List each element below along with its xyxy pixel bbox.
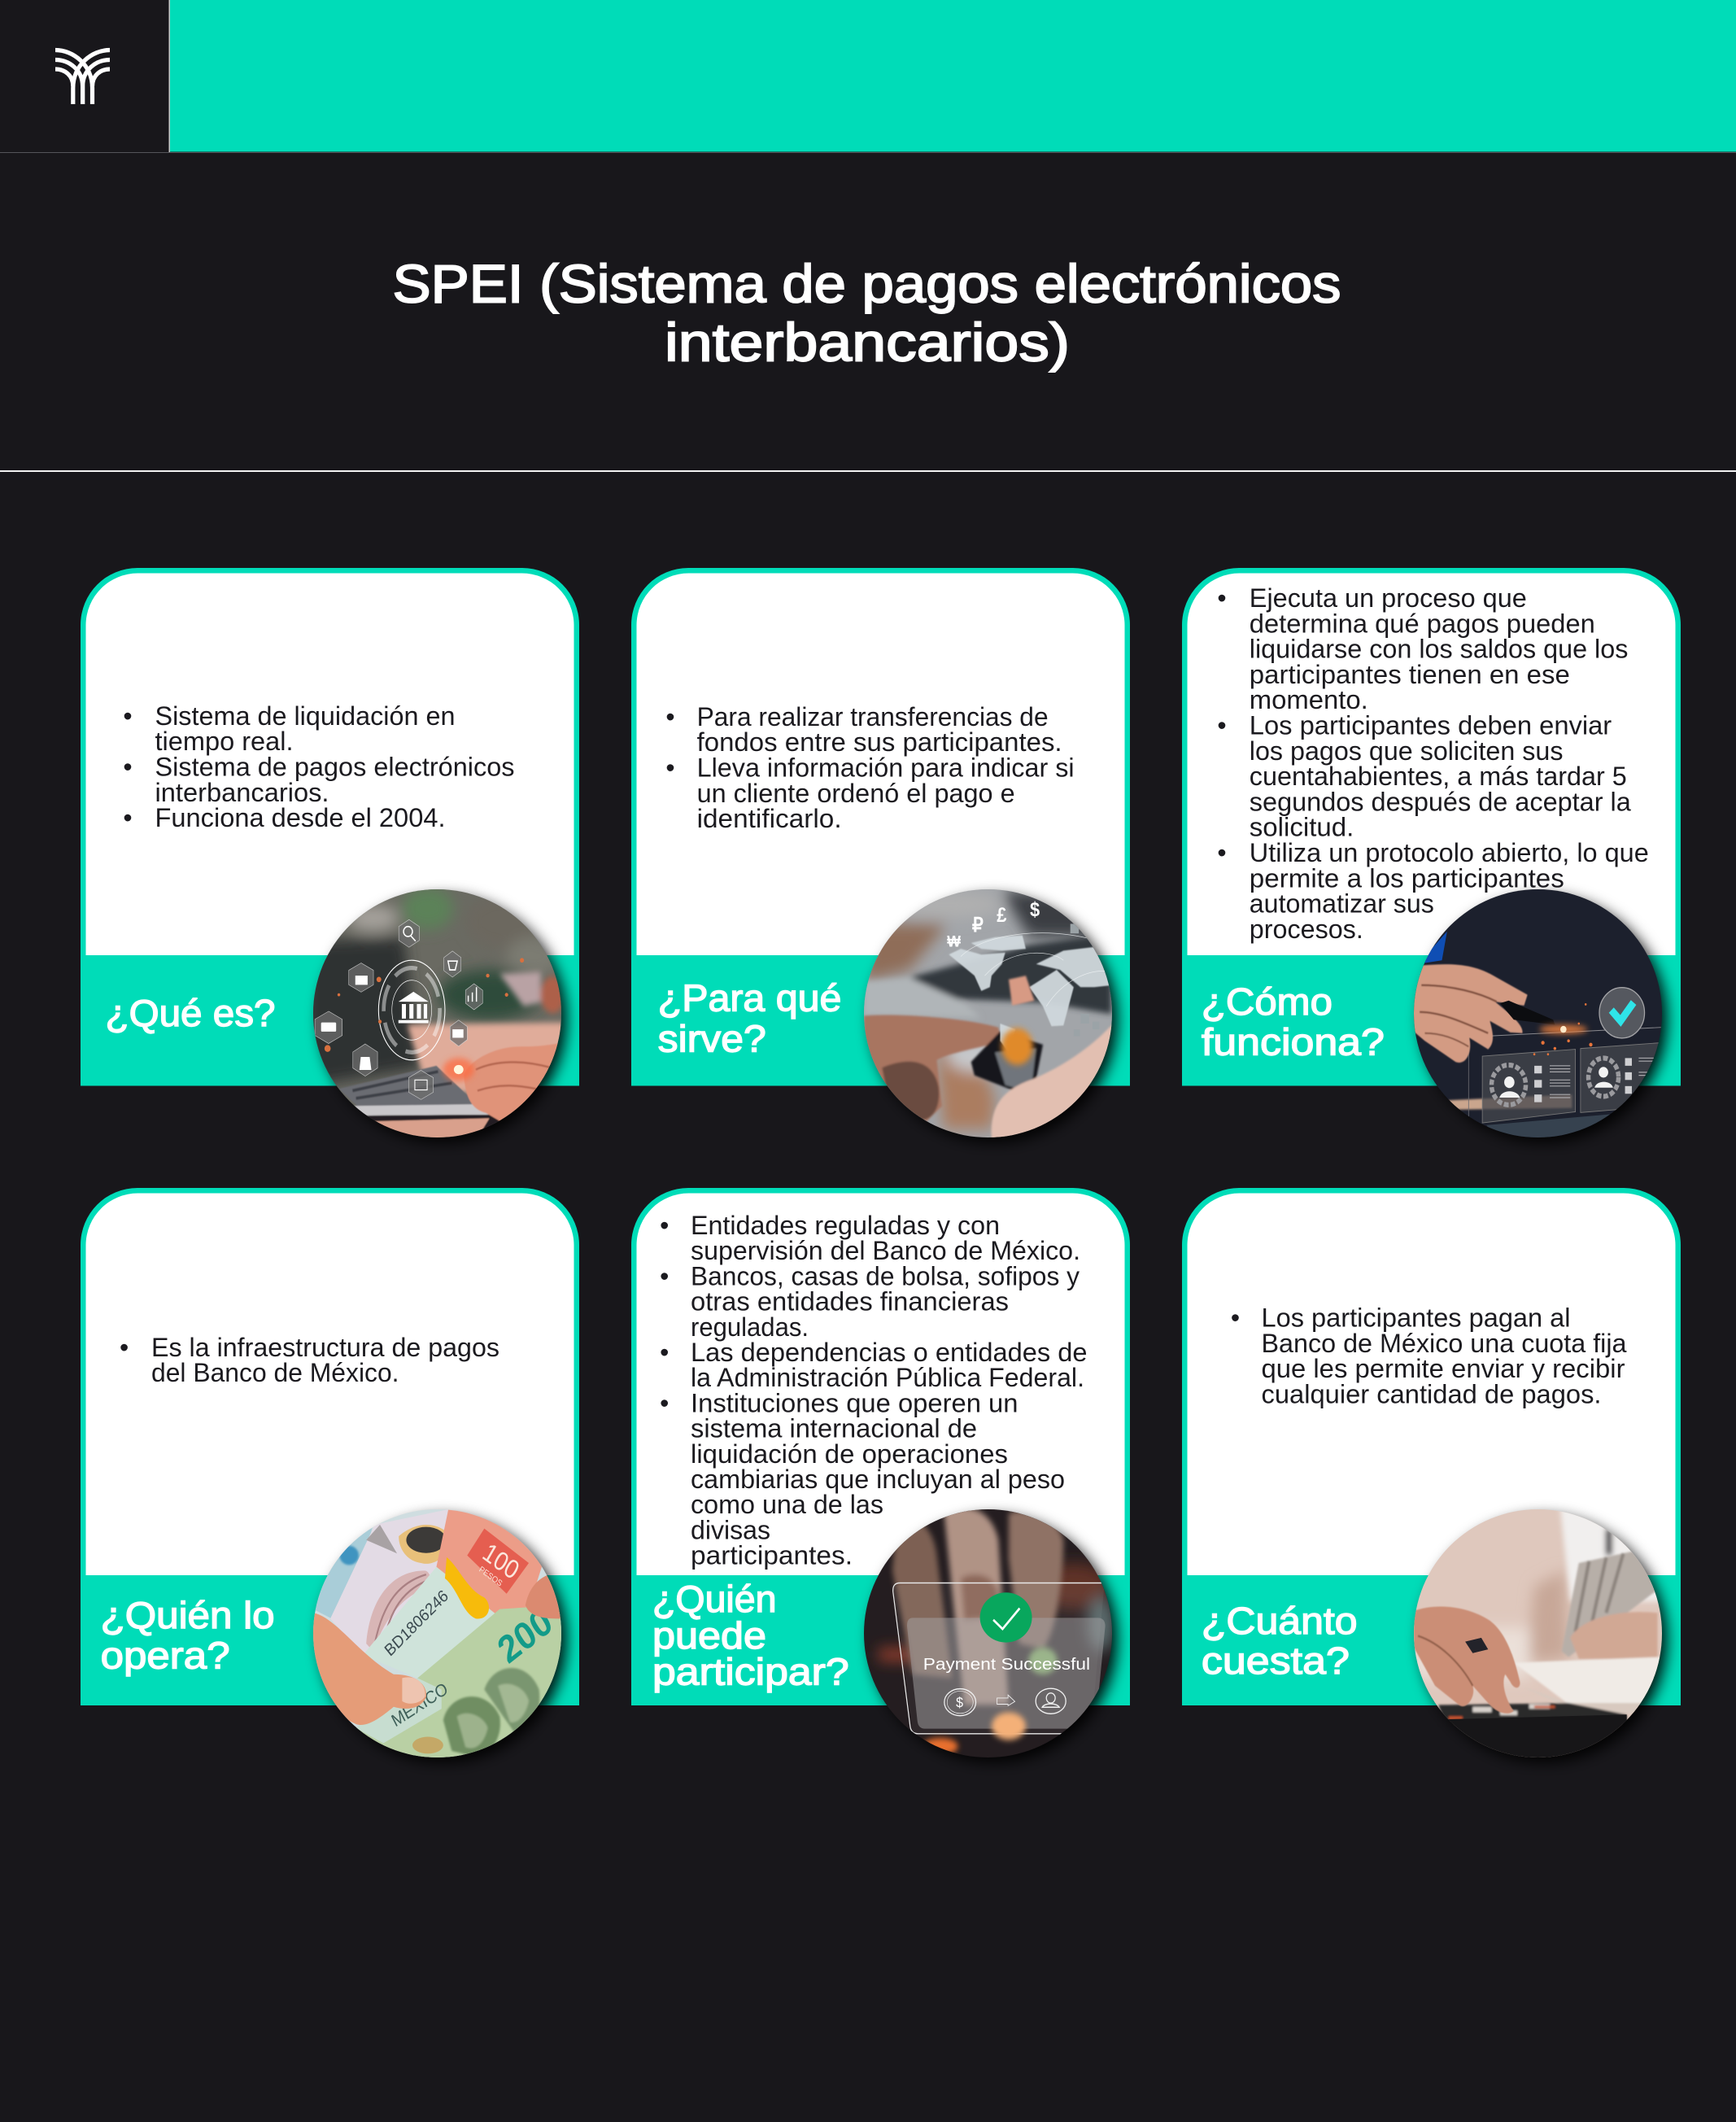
- photo: finger on phone with world map: ₽: [972, 914, 984, 936]
- text: ¿Cómo funciona? list: [1217, 583, 1649, 944]
- photo: payment successful screen: $: [956, 1695, 964, 1711]
- text: ¿Quién lo opera? list: del Banco de México.: [151, 1358, 399, 1387]
- text: ¿Cómo funciona? list: procesos.: [1250, 915, 1363, 944]
- text: ¿Cómo funciona? list: segundos después de aceptar la: [1250, 787, 1631, 816]
- text: ¿Cómo funciona? list: Ejecuta un proceso que: [1250, 583, 1527, 613]
- text: ¿Cómo funciona? list: •: [1217, 583, 1227, 613]
- text: ¿Cómo funciona? list: participantes tienen en ese: [1250, 660, 1570, 689]
- text: ¿Cómo funciona? list: Utiliza un protocolo abierto, lo que: [1250, 838, 1649, 867]
- text: ¿Quién puede participar? list: participantes.: [691, 1541, 853, 1570]
- text: ¿Quién puede participar? list: •: [660, 1211, 669, 1240]
- text: ¿Quién puede participar? list: la Administración Pública Federal.: [691, 1363, 1084, 1392]
- photo: Mexican banknotes: [313, 1509, 566, 1762]
- text: ¿Quién lo opera? list: •: [120, 1333, 129, 1362]
- text: ¿Quién puede participar? list: reguladas.: [691, 1312, 809, 1342]
- text: ¿Cómo funciona? list: permite a los participantes: [1250, 863, 1564, 893]
- text: ¿Quién puede participar? list: otras entidades financieras: [691, 1287, 1009, 1316]
- title: [392, 254, 1341, 373]
- heading: ¿Quién lo opera?: ¿Quién lo: [101, 1594, 275, 1636]
- text: ¿Qué es? list: Funciona desde el 2004.: [155, 803, 446, 832]
- heading: ¿Para qué sirve?: sirve?: [658, 1017, 766, 1059]
- text: ¿Cuánto cuesta? list: Banco de México una cuota fija: [1261, 1329, 1627, 1358]
- heading: ¿Para qué sirve?: [658, 976, 841, 1059]
- text: ¿Cuánto cuesta? list: [1231, 1303, 1627, 1408]
- heading: ¿Para qué sirve?: ¿Para qué: [658, 976, 841, 1019]
- text: ¿Qué es? list: interbancarios.: [155, 778, 329, 807]
- heading: ¿Cuánto cuesta?: [1202, 1600, 1358, 1682]
- text: ¿Cuánto cuesta? list: cualquier cantidad de pagos.: [1261, 1379, 1601, 1408]
- photo: hands on calculator with cash: [1411, 1505, 1667, 1762]
- text: ¿Qué es? list: Sistema de liquidación en: [155, 701, 456, 731]
- text: ¿Cómo funciona? list: automatizar sus: [1250, 889, 1434, 919]
- photo: hand with pen and digital panels: [1411, 889, 1667, 1142]
- text: ¿Cuánto cuesta? list: Los participantes pagan al: [1261, 1303, 1570, 1333]
- photo: finger on phone with world map: $: [1030, 898, 1040, 920]
- photo: Mexican banknotes: MÉXICO: [388, 1679, 451, 1731]
- text: ¿Quién puede participar? list: divisas: [691, 1515, 770, 1544]
- photo: Mexican banknotes: 200: [491, 1600, 560, 1672]
- text: ¿Cuánto cuesta? list: que les permite enviar y recibir: [1261, 1354, 1625, 1383]
- photo: payment successful screen: Payment Successful: [923, 1655, 1090, 1674]
- text: ¿Quién puede participar? list: Entidades reguladas y con: [691, 1211, 1000, 1240]
- text: ¿Para qué sirve? list: un cliente ordenó el pago e: [697, 779, 1015, 808]
- text: ¿Qué es? list: •: [123, 803, 133, 832]
- text: ¿Qué es? list: •: [123, 701, 133, 731]
- text: ¿Cuánto cuesta? list: •: [1231, 1303, 1240, 1333]
- text: ¿Cómo funciona? list: •: [1217, 711, 1227, 740]
- heading: ¿Quién lo opera?: [101, 1594, 275, 1676]
- text: ¿Qué es? list: •: [123, 752, 133, 781]
- heading: ¿Qué es?: ¿Qué es?: [106, 992, 275, 1034]
- text: ¿Cómo funciona? list: Los participantes deben enviar: [1250, 711, 1612, 740]
- photo: Mexican banknotes: 100: [478, 1538, 524, 1586]
- header band: [0, 0, 1736, 153]
- text: ¿Cómo funciona? list: •: [1217, 838, 1227, 867]
- text: ¿Cómo funciona? list: momento.: [1250, 685, 1368, 714]
- text: ¿Para qué sirve? list: fondos entre sus participantes.: [697, 727, 1062, 757]
- text: ¿Quién puede participar? list: [660, 1211, 1087, 1570]
- photo: Mexican banknotes: BD1806246: [382, 1587, 451, 1660]
- text: ¿Quién puede participar? list: como una de las: [691, 1490, 883, 1519]
- panel: ¿Cuánto cuesta?: [1182, 1188, 1681, 1762]
- text: ¿Quién puede participar? list: sistema internacional de: [691, 1414, 977, 1443]
- text: ¿Para qué sirve? list: •: [665, 753, 675, 783]
- text: ¿Quién puede participar? list: •: [660, 1261, 669, 1290]
- photo: finger on phone with world map: £: [997, 904, 1006, 926]
- text: ¿Cómo funciona? list: liquidarse con los saldos que los: [1250, 635, 1628, 664]
- text: ¿Cómo funciona? list: los pagos que soliciten sus: [1250, 736, 1564, 766]
- text: ¿Para qué sirve? list: •: [665, 702, 675, 731]
- text: ¿Quién puede participar? list: Instituciones que operen un: [691, 1388, 1018, 1417]
- text: ¿Para qué sirve? list: Para realizar transferencias de: [697, 702, 1049, 731]
- panel: ¿Cómo funciona?: [1182, 568, 1681, 1142]
- text: ¿Quién puede participar? list: •: [660, 1388, 669, 1417]
- text: ¿Qué es? list: [123, 701, 514, 832]
- title: SPEI (Sistema de pagos electrónicos: [392, 254, 1341, 314]
- heading: ¿Quién puede participar?: ¿Quién: [652, 1578, 776, 1620]
- text: ¿Quién lo opera? list: Es la infraestructura de pagos: [151, 1333, 499, 1362]
- text: ¿Quién puede participar? list: Bancos, casas de bolsa, sofipos y: [691, 1261, 1080, 1290]
- text: ¿Quién puede participar? list: •: [660, 1338, 669, 1367]
- photo: payment successful screen: [864, 1507, 1117, 1762]
- panel: ¿Quién lo opera?: [81, 1188, 579, 1762]
- text: ¿Cómo funciona? list: solicitud.: [1250, 813, 1354, 842]
- panel: ¿Qué es?: [81, 568, 579, 1142]
- text: ¿Quién puede participar? list: Las dependencias o entidades de: [691, 1338, 1087, 1367]
- panel: ¿Quién puede participar?: [631, 1188, 1130, 1762]
- photo: finger on phone with world map: ₩: [947, 932, 961, 950]
- photo: laptop with banking icons: [304, 888, 566, 1142]
- heading: ¿Quién puede participar?: participar?: [652, 1650, 849, 1692]
- text: ¿Qué es? list: Sistema de pagos electrónicos: [155, 752, 514, 781]
- photo: finger on phone with world map: [864, 889, 1117, 1142]
- central dial: [378, 960, 445, 1060]
- title: interbancarios): [665, 312, 1070, 373]
- panel: ¿Para qué sirve?: [631, 568, 1130, 1142]
- heading: ¿Quién puede participar?: puede: [652, 1614, 766, 1657]
- heading: ¿Cómo funciona?: funciona?: [1202, 1020, 1385, 1063]
- text: ¿Quién puede participar? list: liquidación de operaciones: [691, 1439, 1008, 1469]
- text: ¿Para qué sirve? list: [665, 702, 1075, 833]
- text: ¿Cómo funciona? list: determina qué pagos pueden: [1250, 609, 1595, 638]
- text: ¿Cómo funciona? list: cuentahabientes, a más tardar 5: [1250, 762, 1627, 791]
- heading: ¿Quién lo opera?: opera?: [101, 1634, 230, 1676]
- photo: Mexican banknotes: PESOS: [478, 1565, 504, 1589]
- text: ¿Quién lo opera? list: [120, 1333, 499, 1387]
- text: ¿Para qué sirve? list: identificarlo.: [697, 804, 842, 833]
- heading: ¿Cómo funciona?: ¿Cómo: [1202, 980, 1333, 1023]
- text: ¿Quién puede participar? list: cambiarias que incluyan al peso: [691, 1465, 1065, 1494]
- icon: logo: [55, 50, 110, 104]
- heading: ¿Cuánto cuesta?: cuesta?: [1202, 1640, 1350, 1682]
- heading: ¿Cuánto cuesta?: ¿Cuánto: [1202, 1600, 1358, 1642]
- text: ¿Para qué sirve? list: Lleva información para indicar si: [697, 753, 1075, 783]
- text: ¿Qué es? list: tiempo real.: [155, 727, 293, 756]
- heading: ¿Quién puede participar?: [652, 1578, 849, 1692]
- text: ¿Quién puede participar? list: supervisión del Banco de México.: [691, 1236, 1080, 1265]
- heading: ¿Cómo funciona?: [1202, 980, 1385, 1063]
